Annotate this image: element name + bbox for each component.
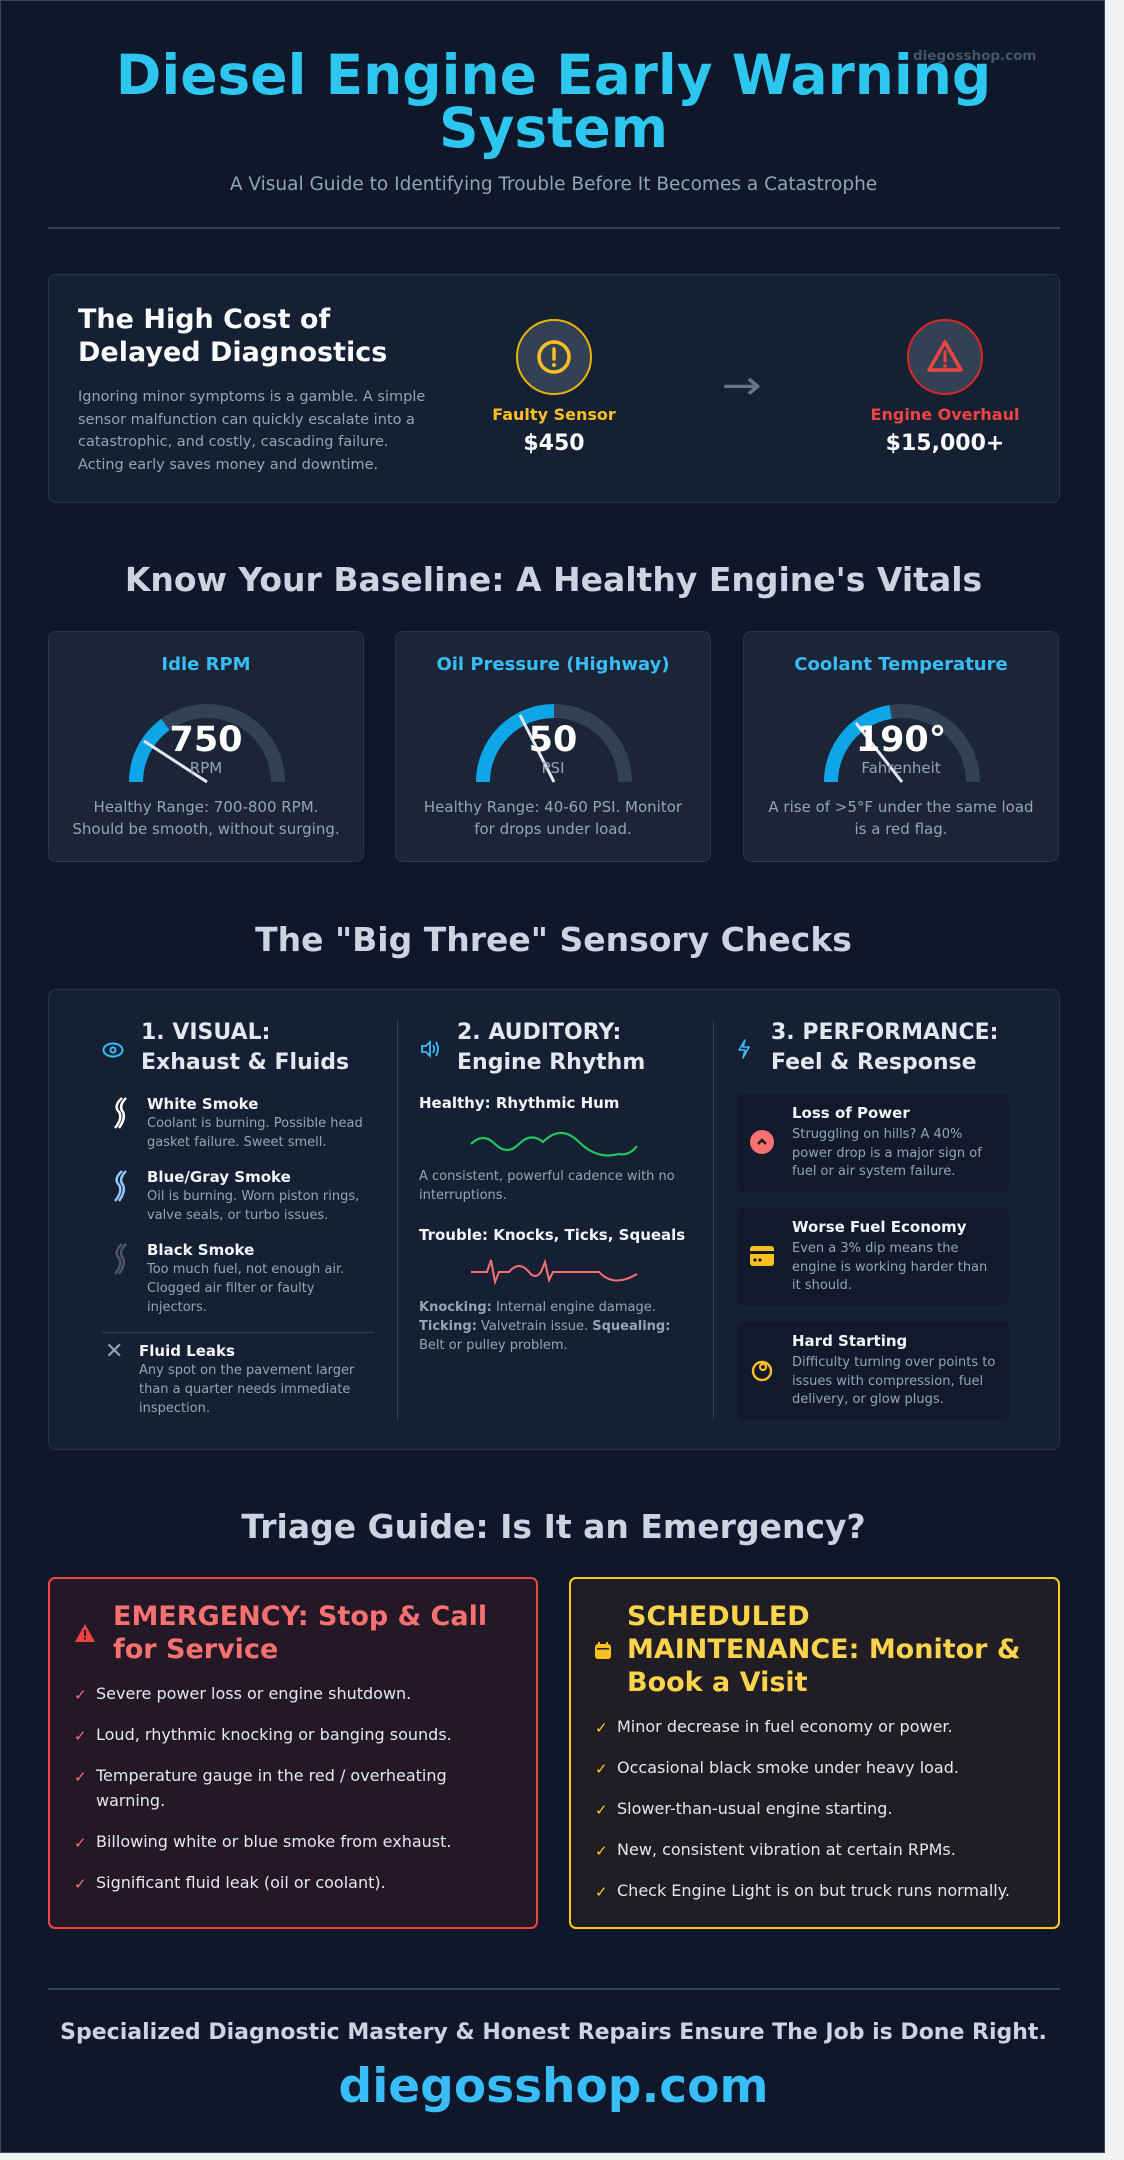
- icon: calendar: [595, 1642, 611, 1659]
- emergency list: Billowing white or blue smoke from exhaust.: [96, 1832, 451, 1851]
- column: auditory: [419, 1020, 685, 1353]
- icon: eye: [102, 1042, 124, 1058]
- column: auditory: A consistent, powerful cadence with no interruptions.: [419, 1169, 675, 1203]
- gauge card: oil pressure: Oil Pressure (Highway): [436, 654, 670, 675]
- card: hard starting: Difficulty turning over points to issues with compression, fuel delivery, or glow plugs.: [792, 1355, 995, 1407]
- card: fuel economy: Even a 3% dip means the engine is working harder than it should.: [792, 1241, 987, 1293]
- cost heading: Delayed Diagnostics: [78, 337, 387, 368]
- visual heading: Exhaust & Fluids: [141, 1050, 349, 1075]
- cost text: Ignoring minor symptoms is a gamble. A simple sensor malfunction can quickly escalate into a catastrophic, and costly, cascading failure. Acting early saves money and downtime.: [78, 389, 425, 472]
- gauge card: oil pressure: PSI: [542, 759, 564, 777]
- emergency heading: for Service: [113, 1634, 278, 1665]
- subtitle: A Visual Guide to Identifying Trouble Before It Becomes a Catastrophe: [230, 174, 877, 195]
- footer domain: diegosshop.com: [339, 2059, 768, 2114]
- panel: big three: [48, 989, 1060, 1450]
- scheduled heading: Book a Visit: [627, 1667, 808, 1698]
- column: visual: Too much fuel, not enough air. Clogged air filter or faulty injectors.: [147, 1262, 344, 1315]
- column: auditory: Knocking: Internal engine damage. Ticking: Valvetrain issue. Squealing: Belt or pulley problem.: [419, 1300, 670, 1353]
- title: Diesel Engine Early Warning: [116, 43, 991, 107]
- gauge card: coolant: Fahrenheit: [861, 759, 941, 777]
- emergency heading: [113, 1601, 487, 1665]
- arrow: →: [722, 363, 762, 409]
- panel: scheduled: ✓: [595, 1883, 608, 1901]
- chart: trouble wave: [471, 1258, 638, 1286]
- gauge card: idle rpm: 750: [169, 720, 243, 760]
- performance heading: [771, 1020, 998, 1075]
- column: visual: Oil is burning. Worn piston rings, valve seals, or turbo issues.: [147, 1189, 359, 1223]
- scheduled list: Occasional black smoke under heavy load.: [617, 1758, 959, 1777]
- performance heading: 3. PERFORMANCE:: [771, 1020, 998, 1045]
- heading: baseline: Know Your Baseline: A Healthy Engine's Vitals: [125, 560, 982, 599]
- gauge card: coolant: 190°: [856, 720, 946, 760]
- panel: emergency: ✓: [74, 1768, 87, 1786]
- scheduled heading: MAINTENANCE: Monitor &: [627, 1634, 1020, 1665]
- gauge card: coolant: Coolant Temperature: [794, 654, 1008, 675]
- scheduled heading: SCHEDULED: [627, 1601, 810, 1632]
- card: loss of power: Loss of Power: [792, 1104, 910, 1122]
- heading: big three: The "Big Three" Sensory Checks: [255, 920, 852, 959]
- gauge card: oil pressure: 50: [529, 720, 577, 760]
- scheduled list: New, consistent vibration at certain RPMs.: [617, 1840, 956, 1859]
- card: fuel economy: Worse Fuel Economy: [792, 1218, 967, 1236]
- panel: emergency: ✓: [74, 1686, 87, 1704]
- visual heading: [141, 1020, 349, 1075]
- gauge card: coolant: A rise of >5°F under the same load is a red flag.: [768, 798, 1034, 838]
- column: visual: Blue/Gray Smoke: [147, 1168, 291, 1186]
- title: System: [439, 96, 668, 160]
- title: [116, 43, 991, 160]
- column: visual: Coolant is burning. Possible head gasket failure. Sweet smell.: [147, 1116, 363, 1150]
- chart: healthy wave: [470, 1132, 638, 1157]
- auditory heading: 2. AUDITORY:: [457, 1020, 621, 1045]
- gauge card: coolant: [743, 631, 1059, 862]
- card: hard starting: Hard Starting: [792, 1332, 907, 1350]
- item: blue smoke: [114, 1168, 359, 1223]
- panel: emergency: ✓: [74, 1834, 87, 1852]
- card: loss of power: [737, 1094, 1009, 1192]
- auditory heading: [457, 1020, 645, 1075]
- panel: scheduled: ✓: [595, 1719, 608, 1737]
- gauge card: idle rpm: Should be smooth, without surging.: [72, 820, 340, 838]
- column: visual: ✕: [105, 1339, 123, 1364]
- emergency list: Loud, rhythmic knocking or banging sounds.: [96, 1725, 452, 1744]
- label: engine overhaul: Engine Overhaul: [871, 405, 1019, 424]
- card: fuel economy: [737, 1208, 1009, 1305]
- panel: scheduled: [569, 1577, 1060, 1929]
- watermark: diegosshop.com: [913, 48, 1036, 64]
- icon: engine overhaul: [907, 319, 983, 395]
- icon: speaker: [421, 1040, 439, 1058]
- emergency list: Temperature gauge in the red / overheating warning.: [96, 1766, 447, 1810]
- price 450: $450: [523, 431, 585, 456]
- panel: scheduled: ✓: [595, 1801, 608, 1819]
- icon: bolt: [738, 1039, 750, 1059]
- auditory heading: Engine Rhythm: [457, 1050, 645, 1075]
- item: white smoke: [114, 1095, 363, 1150]
- cost heading: [78, 304, 387, 368]
- panel: scheduled: ✓: [595, 1760, 608, 1778]
- performance heading: Feel & Response: [771, 1050, 977, 1075]
- panel: high cost: [48, 274, 1060, 503]
- panel: emergency: ✓: [74, 1875, 87, 1893]
- label: faulty sensor: Faulty Sensor: [492, 405, 616, 424]
- panel: emergency: [48, 1577, 538, 1929]
- emergency heading: EMERGENCY: Stop & Call: [113, 1601, 487, 1632]
- card: hard starting: [737, 1322, 1009, 1420]
- scheduled list: Check Engine Light is on but truck runs normally.: [617, 1881, 1010, 1900]
- icon: faulty sensor: [516, 319, 592, 395]
- healthy label: Healthy: Rhythmic Hum: [419, 1094, 619, 1112]
- column: performance: [738, 1020, 998, 1075]
- emergency list: Severe power loss or engine shutdown.: [96, 1684, 411, 1703]
- trouble label: Trouble: Knocks, Ticks, Squeals: [419, 1226, 685, 1244]
- footer tagline: Specialized Diagnostic Mastery & Honest Repairs Ensure The Job is Done Right.: [60, 2020, 1047, 2045]
- column: visual: White Smoke: [147, 1095, 258, 1113]
- panel: emergency: ✓: [74, 1727, 87, 1745]
- card: loss of power: Struggling on hills? A 40% power drop is a major sign of fuel or air system failure.: [792, 1127, 982, 1179]
- item: fluid leaks: [105, 1339, 354, 1416]
- visual heading: 1. VISUAL:: [141, 1020, 270, 1045]
- scheduled list: Minor decrease in fuel economy or power.: [617, 1717, 953, 1736]
- scheduled list: [595, 1717, 1010, 1901]
- panel: scheduled: ✓: [595, 1842, 608, 1860]
- gauge card: oil pressure: [395, 631, 711, 862]
- scheduled heading: [627, 1601, 1020, 1698]
- emergency list: Significant fluid leak (oil or coolant).: [96, 1873, 386, 1892]
- column: visual: Fluid Leaks: [139, 1342, 235, 1360]
- gauge card: idle rpm: Healthy Range: 700-800 RPM.: [94, 798, 318, 816]
- column: visual: [102, 1020, 374, 1416]
- gauge card: idle rpm: RPM: [190, 759, 222, 777]
- gauge card: idle rpm: Idle RPM: [161, 654, 251, 675]
- column: visual: Any spot on the pavement larger than a quarter needs immediate inspection.: [139, 1363, 354, 1416]
- icon: warning: [75, 1624, 95, 1642]
- heading: triage: Triage Guide: Is It an Emergency?: [241, 1507, 866, 1546]
- emergency list: [74, 1684, 452, 1893]
- gauge card: oil pressure: Healthy Range: 40-60 PSI. Monitor for drops under load.: [424, 798, 682, 838]
- item: black smoke: [114, 1241, 344, 1315]
- gauge card: idle rpm: [48, 631, 364, 862]
- cost heading: The High Cost of: [78, 304, 330, 335]
- column: visual: Black Smoke: [147, 1241, 254, 1259]
- price 15000: $15,000+: [886, 431, 1004, 456]
- scheduled list: Slower-than-usual engine starting.: [617, 1799, 892, 1818]
